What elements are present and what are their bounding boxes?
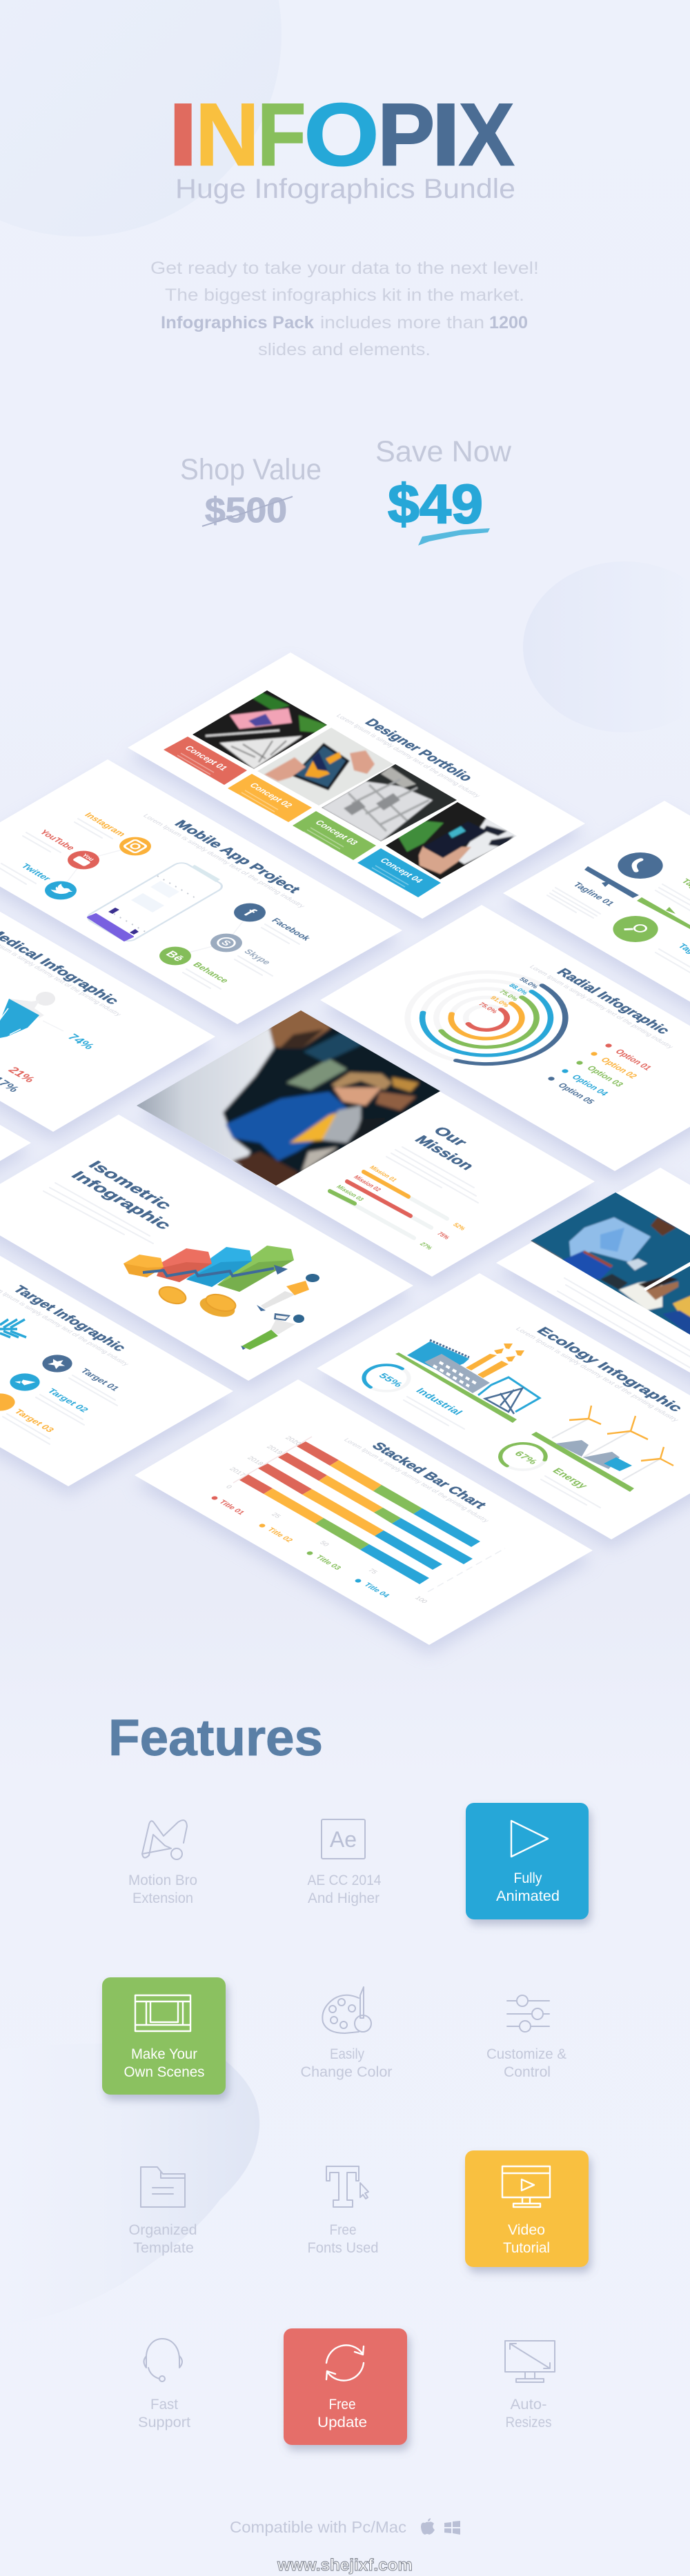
gauge 55% xyxy=(355,1359,418,1397)
icon: star xyxy=(36,1351,79,1376)
paragraph lines xyxy=(43,1183,153,1244)
bar 2018 xyxy=(258,1464,442,1570)
icon: skype xyxy=(204,930,249,956)
concept 02 xyxy=(228,774,312,822)
feature card: Video Tutorial: Tutorial xyxy=(503,2240,550,2256)
heading: Infographic xyxy=(68,1168,176,1232)
concept 01 xyxy=(164,737,247,785)
icon: youtube: You xyxy=(81,852,96,862)
labels: Tagline 01 xyxy=(571,881,617,908)
bar labels xyxy=(334,1165,467,1251)
slide: left partial xyxy=(0,972,31,1238)
year labels: 75 xyxy=(366,1568,379,1575)
logo: INFOPIX: N xyxy=(195,86,259,185)
percentages: 74% xyxy=(65,1032,97,1051)
icon: twitter xyxy=(38,877,83,903)
heading: Features: Features xyxy=(108,1709,323,1766)
legend: Option 03 xyxy=(584,1064,626,1088)
arrow fletching xyxy=(0,1319,26,1337)
3D blocks xyxy=(124,1246,294,1292)
feature: AE CC 2014 xyxy=(308,1819,382,1906)
logo: INFOPIX: I xyxy=(431,85,461,184)
progress bars xyxy=(330,1172,447,1238)
person: woman xyxy=(257,1274,319,1311)
slide shadows xyxy=(0,662,690,1655)
description lines xyxy=(547,884,690,972)
bar labels: 52% xyxy=(451,1222,467,1232)
price: shop value: Shop Value xyxy=(180,453,322,486)
feature: AE CC 2014: And Higher xyxy=(308,1890,379,1906)
intro paragraph: includes more than xyxy=(320,313,484,332)
icon: magnifier xyxy=(604,910,667,948)
feature: Customize & Control: Control xyxy=(504,2064,551,2080)
timeline bars xyxy=(584,866,690,929)
intro paragraph: Get ready to take your data to the next level! xyxy=(150,259,539,278)
gauge 55%: 55% xyxy=(376,1371,406,1388)
heading: Designer Portfolio xyxy=(362,717,476,783)
bar labels: Mission 02 xyxy=(351,1175,382,1192)
year labels: 50 xyxy=(317,1540,331,1548)
slide: Mobile App Project xyxy=(0,759,402,1024)
labels: Target 03 xyxy=(12,1408,57,1434)
caption lines xyxy=(558,1278,690,1368)
feature: Motion Bro Extension: Motion Bro xyxy=(128,1873,197,1888)
feature: Auto-Resizes: Auto- xyxy=(511,2397,546,2413)
price: save now xyxy=(375,435,512,546)
labels xyxy=(12,1367,122,1434)
slide: Isometric Infographic xyxy=(0,1115,413,1381)
feature: Customize & Control: Customize & xyxy=(486,2046,566,2062)
labels: Instagram xyxy=(82,811,128,838)
feature card: Make Your Own Scenes xyxy=(102,1977,226,2095)
subheading: Lorem Ipsum is simply dummy text of the printing industry xyxy=(527,964,675,1050)
decorative blob: features left xyxy=(0,2044,259,2325)
icon: behance: Bē xyxy=(163,949,187,963)
chart values: 58.0% xyxy=(517,977,540,990)
person: man xyxy=(241,1313,304,1350)
concept 03 xyxy=(293,811,376,860)
axes xyxy=(233,1437,312,1483)
labels: YouTube xyxy=(37,828,77,852)
chart values: 75.0% xyxy=(476,1001,500,1015)
connector lines xyxy=(61,846,250,956)
year labels: 0 xyxy=(224,1484,233,1490)
arrow xyxy=(143,1265,288,1276)
concept 04: Concept 04 xyxy=(377,857,426,884)
legend: Title 04 xyxy=(362,1581,392,1599)
subheading: Lorem Ipsum is simply dummy text of the printing industry xyxy=(513,1326,680,1423)
bar 2017 xyxy=(239,1475,429,1584)
logo: INFOPIX: O xyxy=(304,85,379,184)
year labels: 25 xyxy=(269,1512,282,1519)
feature: AE CC 2014: AE CC 2014 xyxy=(308,1873,382,1888)
labels: Target 02 xyxy=(45,1387,91,1414)
feature: Free Fonts Used xyxy=(308,2166,378,2256)
gauge 67% xyxy=(491,1438,555,1475)
description lines xyxy=(0,819,299,989)
slide: Ecology Infographic xyxy=(317,1273,690,1539)
description lines xyxy=(541,1476,600,1508)
slide: Radial Infographic xyxy=(320,905,690,1171)
feature card: Make Your Own Scenes: Own Scenes xyxy=(124,2064,204,2080)
intro paragraph: slides and elements. xyxy=(258,340,431,359)
labels: Skype xyxy=(241,948,273,966)
heading: Mobile App Project xyxy=(171,818,304,895)
heading: Mission xyxy=(411,1133,478,1172)
watermark: www.shejixf.com xyxy=(277,2556,413,2575)
intro paragraph: The biggest infographics kit in the market. xyxy=(165,286,524,305)
legend: Option 04 xyxy=(569,1073,611,1097)
feature: Easily Change Color: Easily xyxy=(330,2046,364,2062)
ground 1 xyxy=(395,1352,517,1423)
labels: Facebook xyxy=(269,917,313,942)
labels: Behance xyxy=(190,961,231,984)
heading xyxy=(68,1158,177,1232)
icon: target 3 xyxy=(0,1390,21,1415)
heading: Ecology Infographic xyxy=(533,1325,686,1414)
icon: windows xyxy=(444,2521,460,2535)
logo: INFOPIX: P xyxy=(377,85,435,184)
feature: Auto-Resizes: Resizes xyxy=(505,2415,552,2430)
concept 03: Concept 03 xyxy=(313,819,361,846)
icon: youtube xyxy=(61,847,106,873)
subheading: Lorem Ipsum is simply dummy text of the printing industry xyxy=(334,713,482,799)
icon: facebook: f xyxy=(239,906,261,919)
photo 3 xyxy=(322,764,457,841)
label: Industrial: Industrial xyxy=(413,1386,465,1417)
feature: Customize & Control xyxy=(486,1995,566,2080)
logo: INFOPIX: X xyxy=(459,85,515,184)
body figure xyxy=(0,992,55,1038)
subheading: Lorem Ipsum is simply dummy text of the printing industry xyxy=(342,1437,491,1524)
photo 4 xyxy=(386,802,516,879)
photo: team meeting xyxy=(137,1010,440,1186)
decorative blob: right middle xyxy=(523,561,690,732)
illustration: factory xyxy=(407,1340,540,1414)
slide: Tagline timeline xyxy=(503,801,690,1064)
feature card: Video Tutorial xyxy=(465,2150,589,2267)
description lines xyxy=(3,1375,117,1444)
icon: facebook xyxy=(227,899,273,926)
feature: Free Fonts Used: Free xyxy=(330,2222,356,2238)
labels xyxy=(571,877,690,969)
concept 02: Concept 02 xyxy=(247,781,295,809)
ground 2 xyxy=(531,1432,634,1492)
logo: INFOPIX: F xyxy=(257,86,306,185)
bar 2020 xyxy=(297,1441,480,1547)
labels xyxy=(19,811,313,984)
leader line xyxy=(43,1021,63,1031)
intro paragraph xyxy=(150,259,539,359)
bar labels: Mission 03 xyxy=(334,1184,365,1202)
percentages xyxy=(0,1032,97,1094)
legend xyxy=(546,1043,654,1106)
slide: Stacked Bar Chart xyxy=(135,1379,593,1645)
legend: Title 03 xyxy=(313,1554,343,1571)
feature: Fast Support xyxy=(138,2339,190,2430)
slide: Team photo xyxy=(497,1168,690,1372)
feature: Auto-Resizes xyxy=(505,2341,555,2430)
feature card: Make Your Own Scenes: Make Your xyxy=(131,2046,197,2062)
photo 2 xyxy=(258,728,393,806)
legend: Option 02 xyxy=(598,1056,640,1080)
coins xyxy=(157,1284,237,1320)
slide: Medical Infographic xyxy=(0,866,215,1132)
year labels: 2017 xyxy=(227,1466,247,1478)
feature: Organized Template: Organized xyxy=(128,2222,197,2238)
label: Energy: Energy xyxy=(550,1466,591,1490)
intro paragraph: 1200 xyxy=(489,313,528,332)
phone mockup xyxy=(84,861,226,943)
subtitle: Huge Infographics Bundle xyxy=(175,174,515,204)
price: shop value xyxy=(180,453,322,530)
feature card: Video Tutorial: Video xyxy=(508,2222,545,2238)
logo: INFOPIX xyxy=(168,85,515,185)
legend: Title 02 xyxy=(265,1526,295,1544)
price: save now: $49 xyxy=(388,473,483,535)
feature card: Free Update: Update xyxy=(317,2415,367,2430)
icon: behance xyxy=(152,943,198,969)
feature: Easily Change Color: Change Color xyxy=(301,2064,392,2080)
year labels: 2018 xyxy=(245,1455,265,1467)
photo 1 xyxy=(193,690,327,769)
percentages: 21% xyxy=(6,1065,38,1084)
illustration: wind and solar xyxy=(552,1406,673,1480)
feature: Motion Bro Extension: Extension xyxy=(132,1890,193,1906)
feature: Organized Template xyxy=(128,2167,197,2256)
heading: Radial Infographic xyxy=(553,966,673,1036)
slide: Our Mission xyxy=(117,993,595,1277)
icon: apple xyxy=(421,2518,435,2535)
decorative blob: top left xyxy=(0,0,282,237)
year labels: 100 xyxy=(413,1595,429,1604)
heading: Isometric xyxy=(85,1158,177,1212)
feature card: Free Update xyxy=(284,2328,407,2445)
concept 01: Concept 01 xyxy=(182,744,230,772)
year labels: 2020 xyxy=(283,1435,303,1447)
photo: team xyxy=(531,1192,690,1335)
icon: phone xyxy=(609,847,672,884)
feature: Fast Support: Fast xyxy=(150,2397,178,2413)
bar labels: Mission 01 xyxy=(367,1165,399,1183)
heading: Our xyxy=(430,1124,472,1148)
feature card: Free Update: Free xyxy=(328,2397,356,2413)
icon: instagram xyxy=(112,833,158,859)
bar 2019 xyxy=(278,1452,473,1564)
feature: Fast Support: Support xyxy=(138,2415,190,2430)
gauge 67%: 67% xyxy=(512,1449,541,1466)
slide: Target Infographic xyxy=(0,1220,233,1486)
legend: Option 05 xyxy=(555,1081,597,1106)
labels: Twitter xyxy=(19,862,54,882)
feature card: Fully Animated xyxy=(466,1803,589,1919)
chart values: 91.0% xyxy=(488,995,511,1008)
chart values: 75.0% xyxy=(497,989,520,1002)
heading: Target Infographic xyxy=(10,1284,130,1353)
icon: rocket xyxy=(3,1370,46,1395)
labels: Target 01 xyxy=(78,1367,122,1392)
feature card: Fully Animated: Fully xyxy=(513,1870,542,1886)
concept 04 xyxy=(357,848,441,897)
slide: Designer Portfolio xyxy=(128,652,585,919)
chart values: 88.0% xyxy=(506,983,530,996)
paragraph lines xyxy=(386,1147,478,1203)
compatibility line: Compatible with Pc/Mac xyxy=(230,2518,406,2536)
feature card: Fully Animated: Animated xyxy=(496,1888,560,1904)
radial chart xyxy=(375,953,598,1083)
price: save now: Save Now xyxy=(375,435,512,468)
chart values xyxy=(476,977,540,1015)
bar labels: 75% xyxy=(435,1231,451,1241)
legend xyxy=(210,1495,392,1599)
icon: skype: S xyxy=(219,939,234,947)
feature: Easily Change Color xyxy=(301,1987,392,2080)
description lines xyxy=(404,1397,464,1429)
bar labels: 27% xyxy=(417,1241,434,1251)
feature: AE CC 2014: Ae xyxy=(330,1827,357,1852)
legend: Option 01 xyxy=(613,1048,654,1072)
price: shop value: $500 xyxy=(205,490,287,530)
year labels xyxy=(224,1435,429,1604)
intro paragraph: Infographics Pack xyxy=(161,313,314,332)
feature: Organized Template: Template xyxy=(133,2240,194,2256)
legend: Title 01 xyxy=(217,1499,246,1516)
heading: Stacked Bar Chart xyxy=(368,1440,490,1511)
year labels: 2019 xyxy=(264,1444,284,1456)
feature: Motion Bro Extension xyxy=(128,1820,197,1906)
feature: Free Fonts Used: Fonts Used xyxy=(308,2240,378,2256)
subheading: Lorem Ipsum is simply dummy text of the printing industry xyxy=(141,813,306,909)
logo: INFOPIX: I xyxy=(168,85,198,184)
